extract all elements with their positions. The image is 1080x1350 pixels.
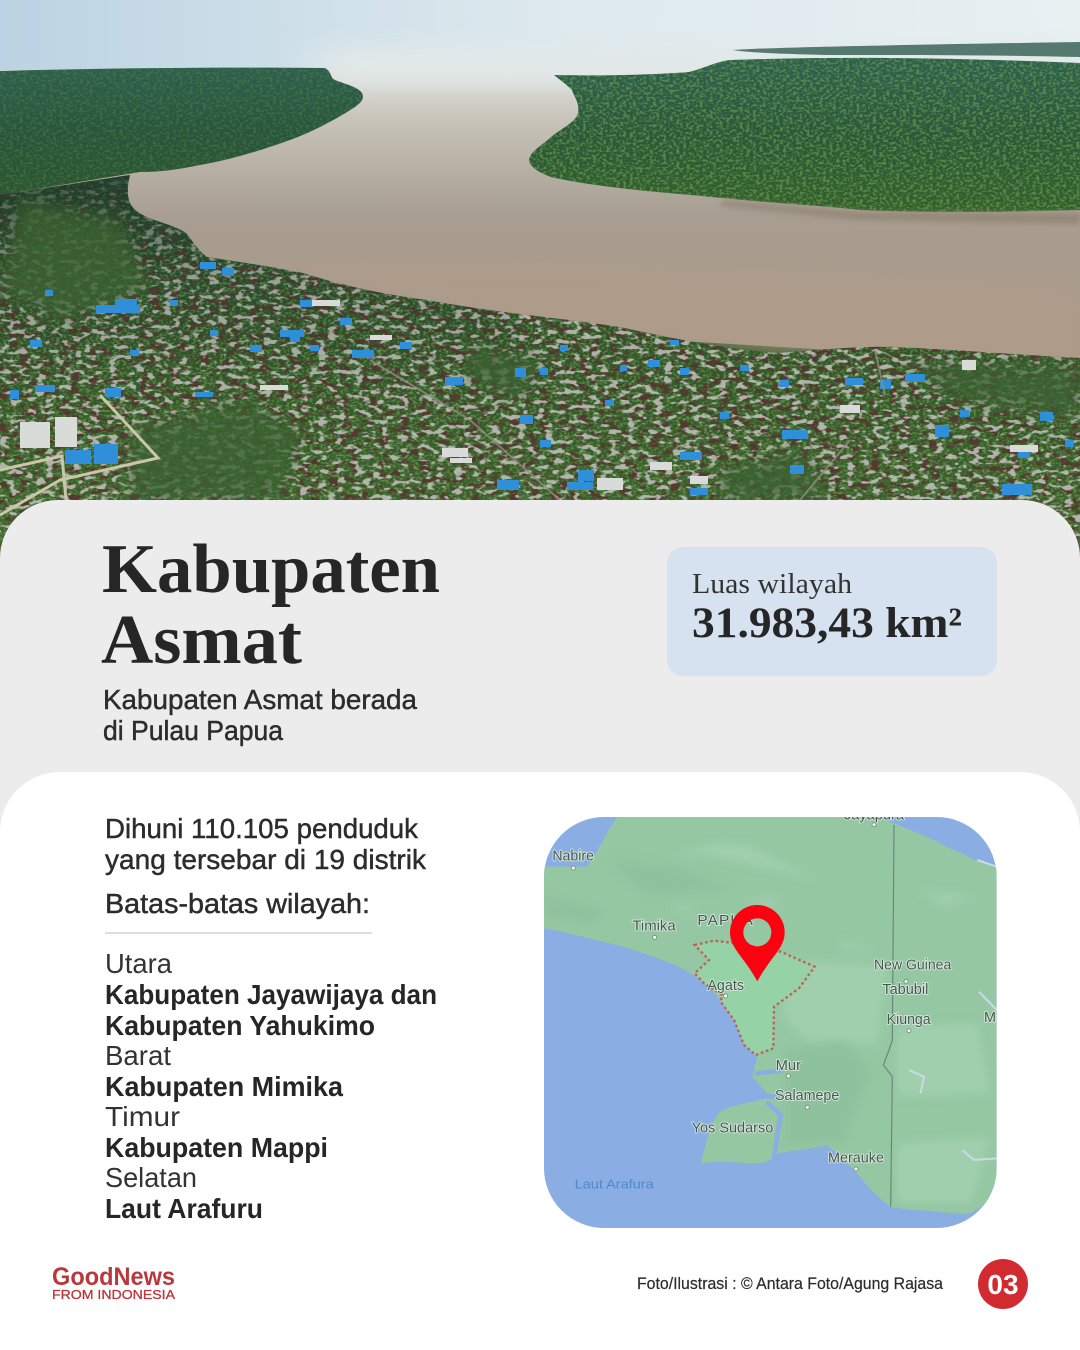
green open areas xyxy=(0,200,1080,500)
place labels: Kiunga xyxy=(887,1012,931,1028)
subtitle xyxy=(103,684,417,746)
gray info panel xyxy=(0,500,1080,860)
logo: GoodNews from Indonesia xyxy=(52,1263,176,1302)
place labels: Mur xyxy=(776,1058,801,1074)
logo: GoodNews from Indonesia: GoodNews xyxy=(52,1263,175,1291)
logo: GoodNews from Indonesia: FROM INDONESIA xyxy=(52,1288,176,1302)
darker upper town xyxy=(0,175,520,362)
place labels: PAPUA xyxy=(697,913,754,929)
lighter mountain bands xyxy=(712,846,986,1200)
place labels: Agats xyxy=(707,978,744,994)
borders list: Kabupaten Mappi xyxy=(105,1132,328,1163)
place labels: Nabire xyxy=(552,849,594,865)
borders list: Barat xyxy=(105,1040,171,1071)
title: Asmat xyxy=(101,602,302,679)
forest reflection xyxy=(720,200,1080,224)
area callout box xyxy=(667,547,997,676)
area label: Luas wilayah xyxy=(692,568,853,600)
population text: Dihuni 110.105 penduduk xyxy=(105,813,419,844)
street xyxy=(370,350,885,500)
area value: 31.983,43 km² xyxy=(692,600,962,647)
right forest xyxy=(525,55,1080,215)
population text: yang tersebar di 19 distrik xyxy=(105,844,427,875)
borders list: Selatan xyxy=(105,1162,197,1193)
icon: red location pin xyxy=(730,905,785,981)
borders list: Kabupaten Mimika xyxy=(105,1071,343,1102)
town texture xyxy=(0,170,1080,570)
subtitle: di Pulau Papua xyxy=(103,715,283,746)
land mass xyxy=(544,817,997,1214)
blue roofs xyxy=(10,262,1074,495)
darker lowland patches xyxy=(793,1044,836,1152)
place labels: Timika xyxy=(632,919,676,935)
photo credit: Foto/Ilustrasi : © Antara Foto/Agung Rajasa xyxy=(637,1275,944,1293)
sea inlets xyxy=(757,1071,781,1157)
sediment shading on river xyxy=(300,260,1080,358)
place markers xyxy=(571,823,911,1171)
borders list: Kabupaten Jayawijaya dan xyxy=(105,979,437,1010)
borders list: Timur xyxy=(105,1101,180,1132)
place labels xyxy=(552,807,996,1191)
map of Asmat regency xyxy=(544,807,997,1228)
river xyxy=(0,70,1080,365)
far island xyxy=(733,42,1080,57)
place labels: Merauke xyxy=(828,1150,884,1166)
compound road xyxy=(0,395,158,515)
borders list xyxy=(105,948,437,1224)
population text xyxy=(105,813,427,875)
hero photo: aerial view of the river and Agats town xyxy=(0,0,1080,570)
place labels: M xyxy=(984,1010,996,1026)
borders list: Utara xyxy=(105,948,172,979)
Asmat regency area and dotted boundary xyxy=(695,941,815,1055)
place labels: Yos Sudarso xyxy=(692,1121,773,1137)
horizon haze xyxy=(320,46,1080,84)
place labels: Tabubil xyxy=(882,982,928,998)
page number badge xyxy=(978,1259,1028,1309)
left forest xyxy=(0,68,363,195)
borders list: Laut Arafuru xyxy=(105,1193,263,1224)
place labels: Jayapura xyxy=(844,807,904,823)
title xyxy=(101,531,440,679)
place labels: Laut Arafura xyxy=(575,1176,654,1191)
rivers and water details xyxy=(909,860,997,1160)
national border xyxy=(883,825,894,1207)
white roofs xyxy=(20,300,1038,490)
place labels: Salamepe xyxy=(775,1088,839,1104)
subtitle: Kabupaten Asmat berada xyxy=(103,684,417,715)
sky xyxy=(0,0,1080,75)
page number badge: 03 xyxy=(987,1269,1019,1300)
borders list: Kabupaten Yahukimo xyxy=(105,1010,375,1041)
white content panel xyxy=(0,772,1080,1350)
borders heading: Batas-batas wilayah: xyxy=(105,888,370,919)
title: Kabupaten xyxy=(102,531,440,608)
place labels: New Guinea xyxy=(874,957,951,973)
